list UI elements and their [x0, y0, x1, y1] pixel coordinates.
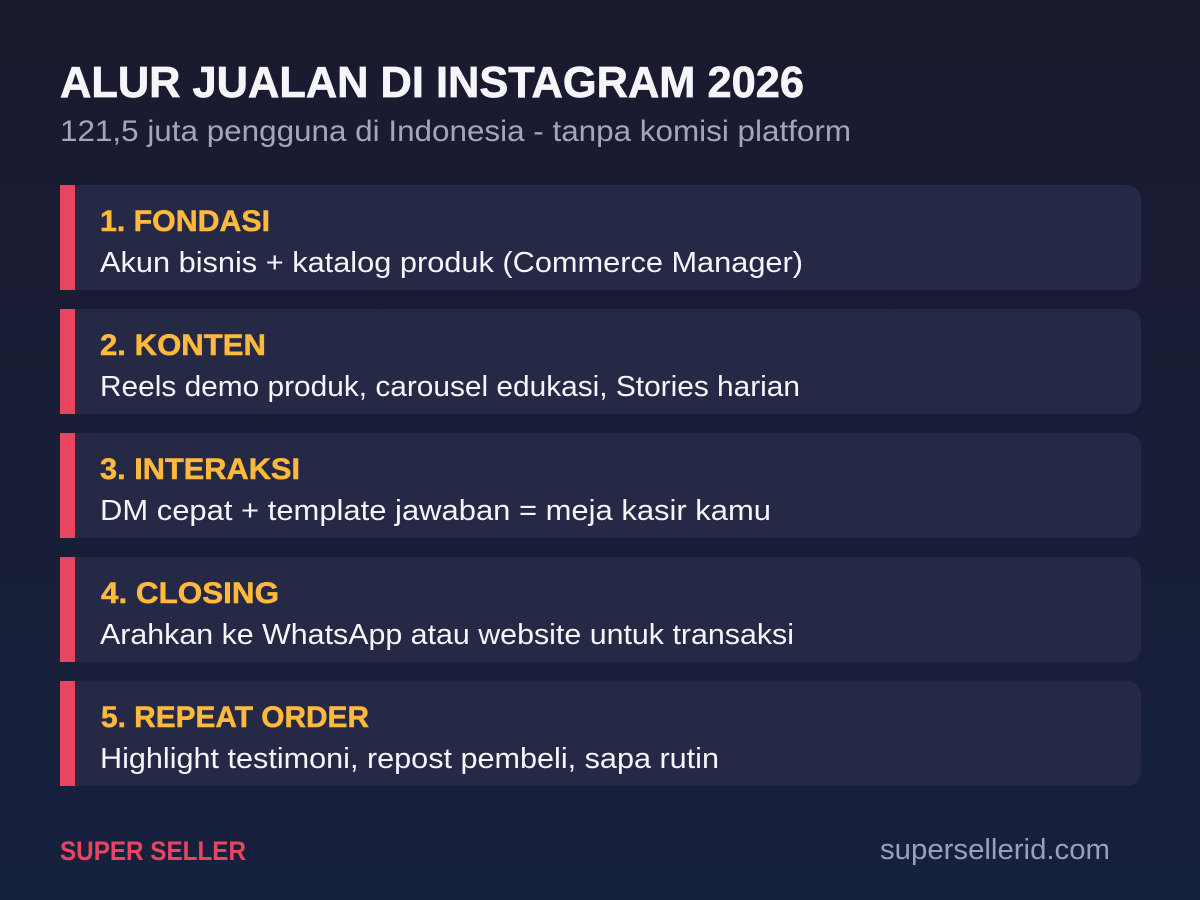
panel: step 2 konten: 2. KONTEN: [100, 329, 266, 362]
panel: step 1 fondasi: [60, 185, 1141, 290]
panel: step 4 closing: Arahkan ke WhatsApp atau website untuk transaksi: [100, 619, 794, 651]
website url: supersellerid.com: [880, 834, 1110, 866]
panel: step 3 interaksi: [60, 433, 1141, 538]
brand name: SUPER SELLER: [60, 836, 246, 866]
panel: step 4 closing: 4. CLOSING: [101, 577, 279, 610]
subtitle: 121,5 juta pengguna di Indonesia - tanpa komisi platform: [60, 115, 851, 148]
panel: step 3 interaksi: DM cepat + template jawaban = meja kasir kamu: [100, 495, 771, 527]
panel: step 1 fondasi: Akun bisnis + katalog produk (Commerce Manager): [100, 247, 803, 279]
panel: step 3 interaksi: 3. INTERAKSI: [100, 453, 300, 486]
title: ALUR JUALAN DI INSTAGRAM 2026: [60, 58, 804, 107]
panel: step 1 fondasi: 1. FONDASI: [100, 205, 270, 238]
panel: step 4 closing: [60, 557, 1141, 662]
panel: step 5 repeat order: [60, 681, 1141, 786]
panel: step 2 konten: Reels demo produk, carousel edukasi, Stories harian: [100, 371, 800, 403]
panel: step 2 konten: [60, 309, 1141, 414]
panel: step 5 repeat order: 5. REPEAT ORDER: [101, 701, 369, 734]
panel: step 5 repeat order: Highlight testimoni, repost pembeli, sapa rutin: [100, 743, 719, 775]
